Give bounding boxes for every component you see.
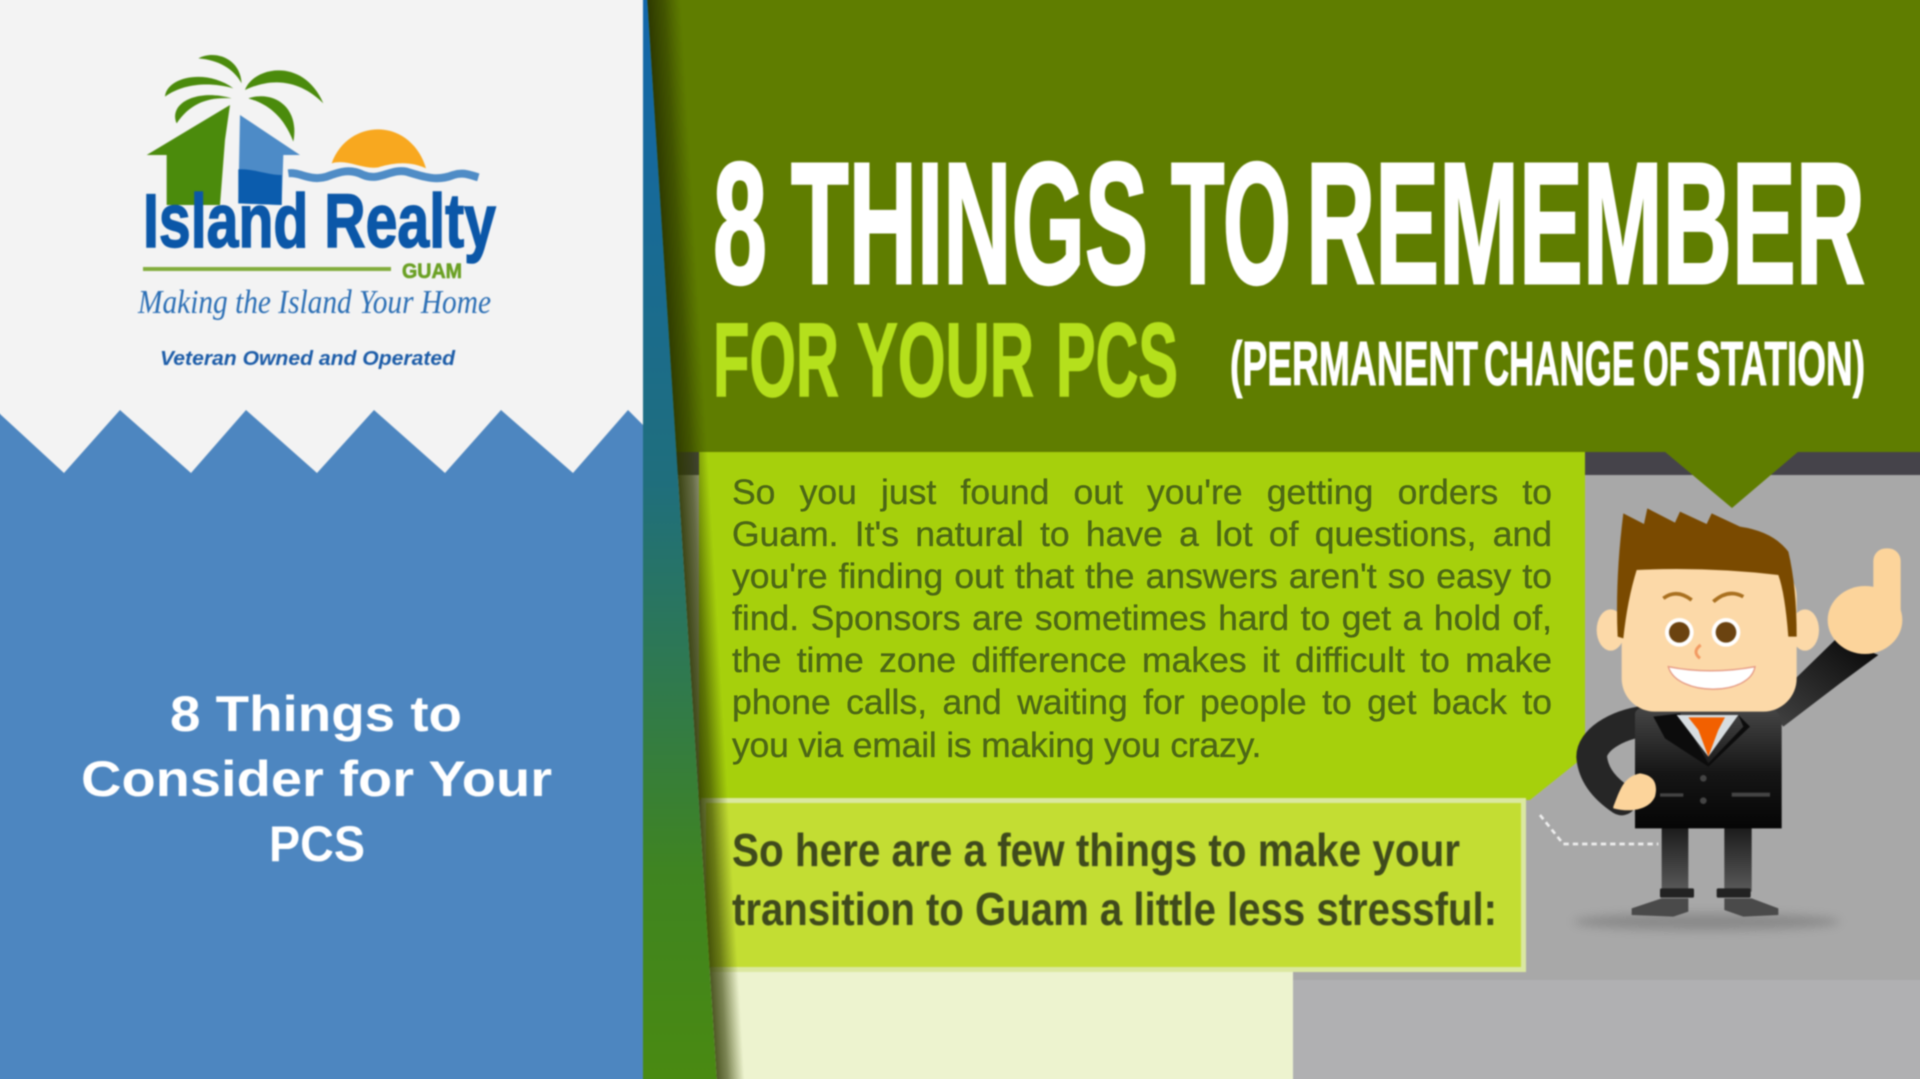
panel: bottom gray row (1293, 980, 1920, 1079)
callout text: transition to Guam a little less stressful: (732, 883, 1497, 935)
palm fronds (165, 55, 323, 142)
green house (147, 105, 230, 205)
logo tagline: Making the Island Your Home (137, 284, 491, 321)
eyes (1665, 618, 1740, 647)
heading: subtitle: PCS (1056, 302, 1178, 419)
logo sublabel: Guam: GUAM (402, 260, 462, 283)
heading: left panel title: Consider for Your (81, 751, 552, 807)
heading: main title: TO (1171, 126, 1291, 320)
text block: intro paragraph: So you just found out you're getting orders to (732, 472, 1552, 512)
text block: intro paragraph: Guam. It's natural to have a lot of questions, and (732, 514, 1552, 554)
heading: subtitle note: (PERMANENT (1230, 330, 1478, 399)
heading: main title (713, 126, 1865, 320)
logo rule (143, 267, 391, 271)
panel: callout box (704, 800, 1524, 970)
hair (1617, 508, 1797, 638)
heading: left panel title (81, 686, 552, 872)
heading: subtitle note: CHANGE (1484, 330, 1635, 399)
panel: left logo background (0, 0, 643, 1079)
hip hand (1613, 773, 1656, 810)
heading: left panel title: PCS (269, 816, 365, 872)
left arm (1592, 721, 1647, 800)
text block: intro paragraph (732, 472, 1552, 766)
legs (1632, 827, 1778, 917)
floor shadow (1573, 913, 1840, 930)
logo: Island Realty Guam (137, 55, 496, 370)
panel: bright green intro (699, 452, 1585, 800)
pockets and buttons (1660, 775, 1770, 804)
text block: intro paragraph: you via email is making you crazy. (732, 725, 1261, 765)
blue house (238, 115, 300, 205)
text block: intro paragraph: you're finding out that the answers aren't so easy to (732, 556, 1552, 596)
panel: olive header (643, 0, 1920, 452)
ears (1597, 609, 1819, 651)
face (1622, 563, 1797, 712)
raised hand (1828, 548, 1902, 654)
heading: subtitle: YOUR (857, 302, 1034, 419)
heading: subtitle: FOR (713, 302, 839, 419)
logo wordmark: Island Realty (143, 179, 496, 264)
shirt (1677, 715, 1738, 757)
panel: left light gray column (660, 475, 720, 975)
icon: palm and houses mark (147, 55, 478, 205)
eyebrows (1663, 593, 1743, 602)
callout text (732, 824, 1497, 935)
decoration: slanted shadow (646, 0, 756, 1079)
text block: intro paragraph: find. Sponsors are sometimes hard to get a hold of, (732, 598, 1552, 638)
sun (332, 129, 426, 168)
veteran line: Veteran Owned and Operated (160, 348, 456, 370)
callout text: So here are a few things to make your (732, 824, 1460, 876)
nose (1696, 645, 1701, 658)
smile (1668, 667, 1755, 689)
heading: main title: 8 (713, 126, 767, 320)
raised arm (1767, 638, 1878, 727)
text block: intro paragraph: phone calls, and waiting for people to get back to (732, 682, 1552, 722)
dotted line (1540, 815, 1658, 844)
heading: subtitle (713, 302, 1178, 419)
text block: intro paragraph: the time zone difference makes it difficult to make (732, 640, 1552, 680)
jacket (1635, 706, 1782, 828)
pointer: header triangle (1664, 451, 1799, 508)
heading: left panel title: 8 Things to (170, 686, 462, 742)
heading: subtitle note: OF (1643, 330, 1689, 399)
illustration: businessman pointing up (1540, 508, 1902, 930)
waves (288, 171, 478, 178)
panel: pale green bottom box (700, 972, 1293, 1079)
heading: main title: THINGS (791, 126, 1148, 320)
panel: blue zigzag title panel (0, 396, 643, 1079)
tie (1688, 717, 1725, 757)
lapels (1653, 713, 1750, 767)
heading: subtitle note (1230, 330, 1865, 399)
strip: slanted blue to green ribbon (643, 0, 718, 1079)
panel: right gray background (643, 452, 1920, 1079)
band: dark strip under header (660, 452, 1920, 475)
